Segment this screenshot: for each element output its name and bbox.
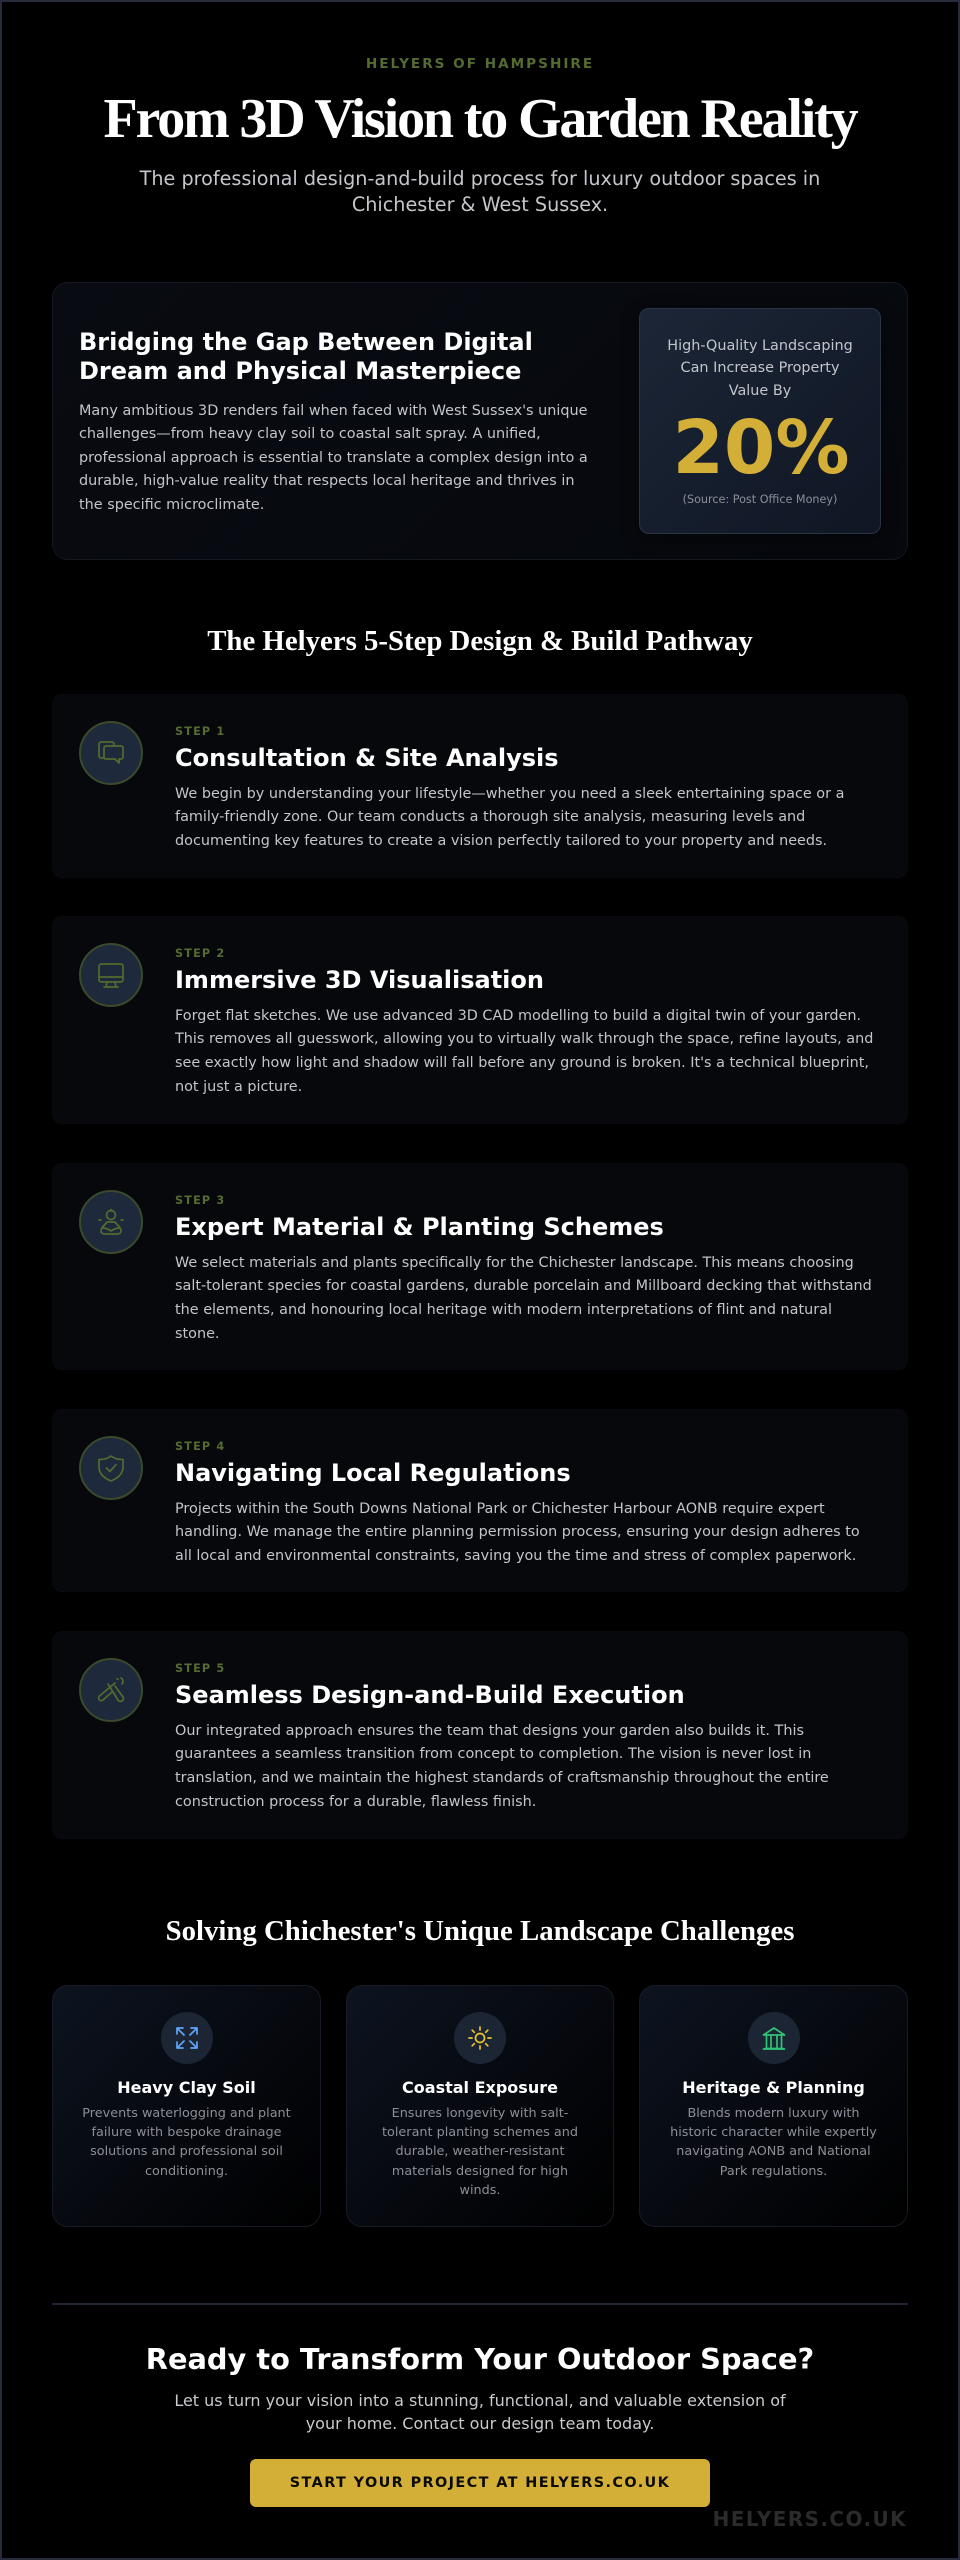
card text: tolerant planting schemes and <box>382 2125 578 2140</box>
eyebrow: brand name: HELYERS OF HAMPSHIRE <box>366 56 594 72</box>
step 2 text: Immersive 3D Visualisation <box>175 966 544 994</box>
watermark: HELYERS.CO.UK <box>713 2507 907 2531</box>
step 4 text: handling. We manage the entire planning permission process, ensuring your design adheres to <box>175 1524 860 1540</box>
step 1 card <box>52 694 908 878</box>
challenge card: heritage <box>639 1985 908 2227</box>
step 5 text: guarantees a seamless transition from concept to completion. The vision is never lost in <box>175 1746 811 1762</box>
step 5 text: Seamless Design-and-Build Execution <box>175 1681 685 1709</box>
step 5 text: Our integrated approach ensures the team that designs your garden also builds it. This <box>175 1722 804 1738</box>
stat label: Value By <box>729 383 791 399</box>
subtitle: Chichester & West Sussex. <box>352 193 608 216</box>
step 3 text: salt-tolerant species for coastal gardens, durable porcelain and Millboard decking that withstand <box>175 1278 872 1294</box>
step 2 text: Forget flat sketches. We use advanced 3D CAD modelling to build a digital twin of your garden. <box>175 1008 861 1024</box>
title: From 3D Vision to Garden Reality <box>103 88 857 150</box>
step 2 text: This removes all guesswork, allowing you to virtually walk through the space, refine layouts, and <box>175 1031 873 1047</box>
intro text <box>79 403 588 513</box>
icon: sun <box>454 2012 506 2064</box>
step 2 card <box>52 916 908 1124</box>
step 1 text: family-friendly zone. Our team conducts a thorough site analysis, measuring levels and <box>175 809 805 825</box>
footer text <box>174 2391 786 2433</box>
divider <box>52 2303 908 2305</box>
card text: navigating AONB and National <box>676 2144 871 2159</box>
icon: shield check <box>79 1436 143 1500</box>
step 5 text: translation, and we maintain the highest standards of craftsmanship throughout the entire <box>175 1770 829 1786</box>
step 1 text: Consultation & Site Analysis <box>175 744 559 772</box>
step 5 text: construction process for a durable, flawless finish. <box>175 1794 536 1810</box>
card text: Prevents waterlogging and plant <box>82 2106 291 2121</box>
card title: Heavy Clay Soil <box>117 2078 256 2097</box>
intro heading: Bridging the Gap Between Digital <box>79 328 533 356</box>
panel: intro <box>52 282 908 560</box>
icon: classical building <box>748 2012 800 2064</box>
card text: durable, weather-resistant <box>396 2144 564 2159</box>
icon: person with plant <box>79 1190 143 1254</box>
step 1 text: documenting key features to create a vision perfectly tailored to your property and needs. <box>175 833 827 849</box>
card text <box>82 2106 291 2179</box>
icon: chat bubbles <box>79 721 143 785</box>
step 1 text: We begin by understanding your lifestyle—whether you need a sleek entertaining space or a <box>175 786 844 802</box>
step 4 text: all local and environmental constraints, saving you the time and stress of complex paperwork. <box>175 1548 856 1564</box>
icon: tools <box>79 1658 143 1722</box>
step 4 text: Projects within the South Downs National Park or Chichester Harbour AONB require expert <box>175 1500 825 1516</box>
step 1 text <box>175 725 844 849</box>
step 3 text: STEP 3 <box>175 1194 225 1207</box>
intro heading <box>79 328 533 385</box>
section heading: challenges: Solving Chichester's Unique Landscape Challenges <box>166 1915 794 1947</box>
stat source: (Source: Post Office Money) <box>683 493 837 506</box>
step 2 text <box>174 947 873 1095</box>
stat number: 20% <box>672 405 850 491</box>
step 3 card <box>52 1163 908 1370</box>
step 4 card <box>52 1409 908 1592</box>
stat label <box>667 338 853 399</box>
step 4 text: Navigating Local Regulations <box>175 1459 571 1487</box>
step 3 text: the elements, and honouring local heritage with modern interpretations of flint and natural <box>175 1302 832 1318</box>
card text: historic character while expertly <box>670 2125 877 2140</box>
card text: winds. <box>460 2183 500 2198</box>
card text: failure with bespoke drainage <box>92 2125 281 2140</box>
step 3 text: We select materials and plants specifically for the Chichester landscape. This means choosing <box>175 1254 854 1270</box>
card text: conditioning. <box>145 2164 228 2179</box>
CTA button: START YOUR PROJECT AT HELYERS.CO.UK <box>290 2475 670 2491</box>
card text: Ensures longevity with salt- <box>392 2106 568 2121</box>
intro text: durable, high-value reality that respects local heritage and thrives in <box>79 473 574 489</box>
step 5 card <box>52 1631 908 1839</box>
stat box: 20% <box>639 308 881 534</box>
step 2 text: not just a picture. <box>175 1079 302 1095</box>
step 2 text: see exactly how light and shadow will fall before any ground is broken. It's a technical blueprint, <box>175 1055 869 1071</box>
card text: materials designed for high <box>392 2164 568 2179</box>
subtitle: The professional design-and-build process for luxury outdoor spaces in <box>140 167 820 190</box>
footer text: Let us turn your vision into a stunning, functional, and valuable extension of <box>174 2391 786 2410</box>
card title: Heritage & Planning <box>682 2078 865 2097</box>
footer text: your home. Contact our design team today. <box>306 2414 654 2433</box>
intro text: professional approach is essential to translate a complex design into a <box>79 450 588 466</box>
icon: monitor <box>79 943 143 1007</box>
intro text: the specific microclimate. <box>79 497 264 513</box>
icon: expand arrows <box>161 2012 213 2064</box>
CTA button <box>250 2459 710 2507</box>
step 4 text <box>175 1440 860 1564</box>
step 5 text <box>175 1662 829 1810</box>
step 3 text <box>175 1194 872 1342</box>
footer heading: Ready to Transform Your Outdoor Space? <box>146 2342 814 2376</box>
stat label: High-Quality Landscaping <box>667 338 853 354</box>
card text <box>382 2106 578 2198</box>
step 3 text: stone. <box>175 1326 220 1342</box>
card text: Park regulations. <box>720 2164 827 2179</box>
step 3 text: Expert Material & Planting Schemes <box>175 1213 664 1241</box>
step 2 text: STEP 2 <box>175 947 225 960</box>
step 5 text: STEP 5 <box>175 1662 225 1675</box>
subtitle <box>140 167 820 216</box>
intro text: challenges—from heavy clay soil to coastal salt spray. A unified, <box>79 426 541 442</box>
intro heading: Dream and Physical Masterpiece <box>79 357 521 385</box>
step 4 text: STEP 4 <box>175 1440 225 1453</box>
card text: solutions and professional soil <box>90 2144 283 2159</box>
intro text: Many ambitious 3D renders fail when faced with West Sussex's unique <box>79 403 587 419</box>
step 1 text: STEP 1 <box>175 725 225 738</box>
card text <box>670 2106 877 2179</box>
card title: Coastal Exposure <box>402 2078 558 2097</box>
stat label: Can Increase Property <box>681 360 839 376</box>
challenge card: clay soil <box>52 1985 321 2227</box>
challenge card: coastal <box>346 1985 614 2227</box>
card text: Blends modern luxury with <box>687 2106 860 2121</box>
section heading: pathway: The Helyers 5-Step Design & Build Pathway <box>207 625 753 657</box>
